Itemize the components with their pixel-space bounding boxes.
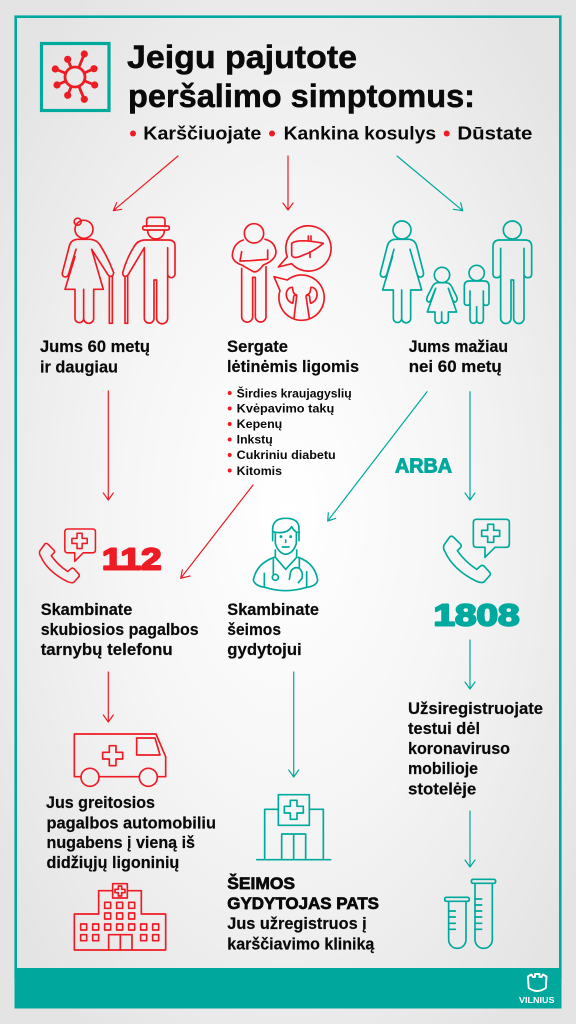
arrow: symptoms to chronic illness <box>283 156 293 210</box>
label: call emergency: skubiosios pagalbos <box>41 620 199 639</box>
icon: ambulance <box>74 734 166 786</box>
logo: Vilnius <box>519 974 555 1005</box>
label: call emergency: tarnybų telefonu <box>41 640 173 659</box>
label: chronic illness: Sergate <box>227 337 288 356</box>
arrow: registration to test tubes <box>465 811 475 867</box>
list: chronic illnesses: Inkstų <box>237 432 273 446</box>
label: register for test <box>408 699 543 798</box>
label: under 60 <box>409 337 508 376</box>
icon: elderly couple <box>62 217 175 324</box>
icon: hospital <box>74 884 166 950</box>
label: under 60: Jums mažiau <box>409 337 508 356</box>
arrow: family doctor to clinic <box>289 672 299 777</box>
label: over 60: ir daugiau <box>40 358 118 376</box>
logo: Vilnius: VILNIUS <box>519 995 555 1005</box>
label: ambulance text: pagalbos automobiliu <box>46 813 216 832</box>
arrow: 1808 to registration <box>465 640 475 689</box>
label: register for test: mobilioje <box>408 759 478 778</box>
list: chronic illnesses: Širdies kraujagyslių <box>237 385 352 400</box>
label: family doctor registers: karščiavimo kliniką <box>227 934 375 953</box>
arrow: symptoms to under 60 <box>397 156 463 211</box>
icon: clinic <box>257 795 331 860</box>
arrow: under 60 to family doctor <box>328 392 427 521</box>
number: 1808: 1808 <box>434 598 520 632</box>
label: call family doctor: Skambinate <box>227 600 319 619</box>
label: family doctor registers: GYDYTOJAS PATS <box>227 894 379 913</box>
label: call family doctor: gydytojui <box>227 640 302 659</box>
symptoms list: Karščiuojate <box>143 122 261 144</box>
title <box>127 39 475 114</box>
symptoms list <box>130 122 532 144</box>
list: chronic illnesses: Cukriniu diabetu <box>237 448 336 462</box>
icon: doctor <box>253 518 318 591</box>
list: chronic illnesses: Kepenų <box>237 417 282 431</box>
label: call family doctor <box>227 600 319 659</box>
label: chronic illness: lėtinėmis ligomis <box>227 357 359 376</box>
title: peršalimo simptomus: <box>128 78 475 114</box>
title: Jeigu pajutote <box>127 39 357 75</box>
list: chronic illnesses <box>228 385 352 478</box>
label: register for test: testui dėl <box>408 719 480 738</box>
label: call emergency: Skambinate <box>41 600 132 619</box>
label: over 60 <box>40 337 150 376</box>
icon: phone with medical bubble, teal <box>444 519 509 583</box>
label: register for test: koronaviruso <box>408 739 510 758</box>
footer band <box>14 968 562 1008</box>
label: or: ARBA <box>395 456 452 478</box>
label: chronic illness <box>227 337 359 376</box>
arrow: under 60 to 1808 <box>465 392 475 500</box>
label: call emergency <box>41 600 199 659</box>
symptoms list: Kankina kosulys <box>284 122 436 144</box>
label: family doctor registers: ŠEIMOS <box>227 874 295 893</box>
label: under 60: nei 60 metų <box>409 357 502 376</box>
label: call family doctor: šeimos <box>227 620 281 639</box>
arrow: over 60 to 112 <box>103 391 113 500</box>
icon: chronic patient with liver and kidneys <box>232 224 331 322</box>
label: register for test: stotelėje <box>408 779 476 798</box>
label: ambulance text: nugabens į vieną iš <box>46 833 195 852</box>
label: family doctor registers <box>227 874 379 953</box>
label: ambulance text: didžiųjų ligoninių <box>46 853 179 872</box>
label: over 60: Jums 60 metų <box>40 337 150 356</box>
number: 112: 112 <box>102 542 162 576</box>
arrow: 112 to ambulance <box>103 672 113 722</box>
label: family doctor registers: Jus užregistruos į <box>227 914 367 933</box>
symptoms list: Dūstate <box>457 122 532 144</box>
icon: family <box>380 221 532 323</box>
arrow: symptoms to seniors <box>113 156 178 211</box>
icon: test tubes <box>445 879 496 948</box>
icon: virus in teal box <box>42 44 109 110</box>
label: register for test: Užsiregistruojate <box>408 699 543 718</box>
list: chronic illnesses: Kvėpavimo takų <box>237 402 334 416</box>
label: ambulance text <box>46 793 216 872</box>
arrow: chronic illness to 112 <box>181 485 253 578</box>
icon: phone with medical bubble, red <box>39 529 95 583</box>
list: chronic illnesses: Kitomis <box>237 464 282 478</box>
label: ambulance text: Jus greitosios <box>46 793 155 812</box>
